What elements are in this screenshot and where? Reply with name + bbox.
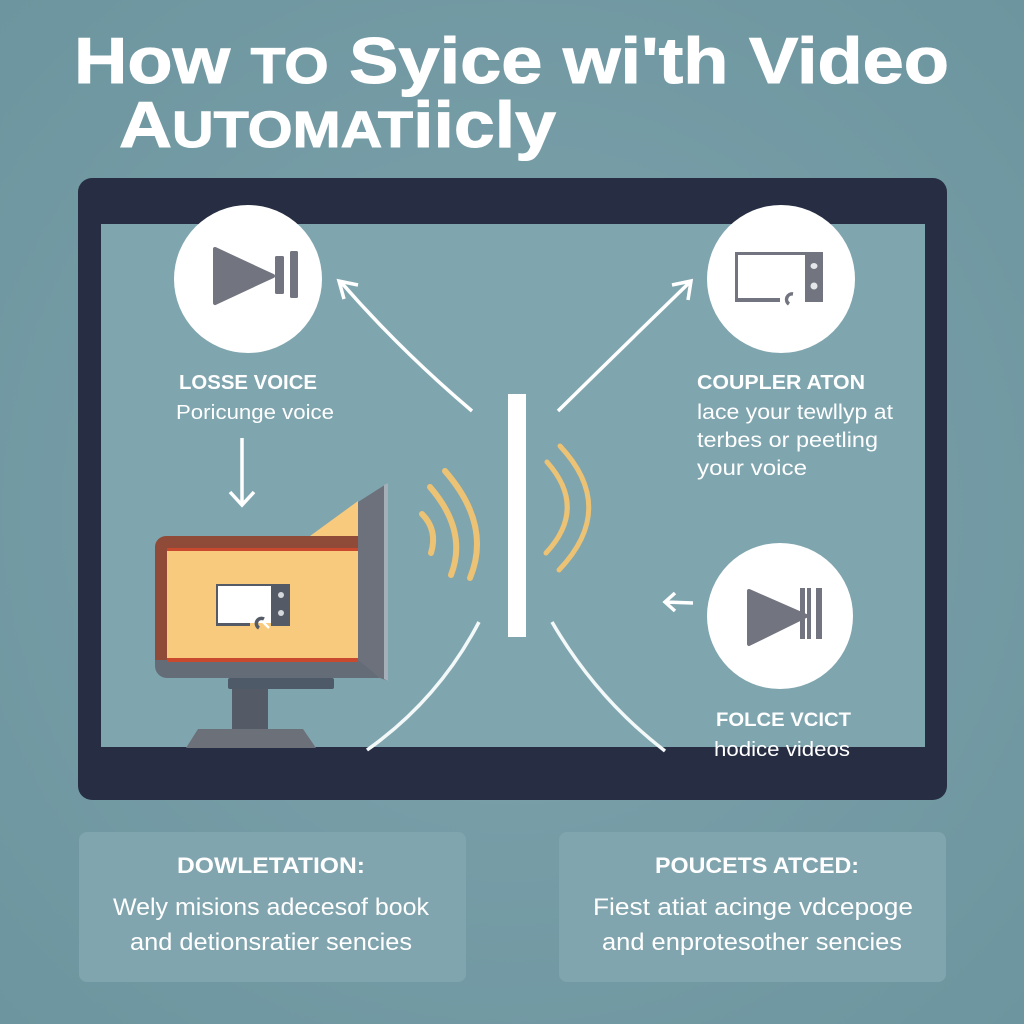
- icon: computer: [155, 483, 388, 748]
- icon: play circle lower right: [707, 543, 853, 689]
- panel: dow let ation: and detionsratier sencies: [130, 929, 412, 956]
- text: losse voice: Poricunge voice: [176, 401, 334, 424]
- arrow: up right: [558, 281, 691, 411]
- icon: screen circle top right: [707, 205, 855, 353]
- icon: sound waves left: [422, 471, 477, 578]
- text: folce vcict: hodice videos: [714, 739, 850, 761]
- text: losse voice: [176, 372, 334, 424]
- text: folce vcict: [714, 710, 851, 761]
- panel: monitor frame: [78, 178, 947, 800]
- panel: poucets atced: Fiest atiat acinge vdcepoge: [593, 894, 913, 921]
- panel: dow let ation: [79, 832, 466, 982]
- panel: dow let ation: Wely misions adecesof book: [113, 894, 430, 921]
- title: AUTOMAT iicly: [119, 88, 556, 161]
- arrow: lower left curve: [367, 622, 479, 750]
- arrow: down to computer: [230, 438, 254, 505]
- text: coupler aton: lace your tewllyp at: [697, 401, 893, 424]
- panel: dow let ation: DOWLETATION:: [177, 853, 365, 878]
- text: coupler aton: COUPLER ATON: [697, 372, 865, 394]
- panel: poucets atced: POUCETS ATCED:: [655, 853, 859, 878]
- text: coupler aton: your voice: [697, 457, 807, 480]
- panel: poucets atced: [559, 832, 946, 982]
- arrow: up left: [339, 281, 472, 411]
- text: losse voice: LOSSE VOICE: [179, 372, 317, 394]
- text: folce vcict: FOLCE VCICT: [716, 710, 851, 731]
- centre bar: [508, 394, 526, 637]
- icon: play circle top left: [174, 205, 322, 353]
- panel: poucets atced: and enprotesother sencies: [602, 929, 902, 956]
- text: coupler aton: [697, 372, 893, 480]
- icon: sound waves right: [546, 446, 589, 570]
- title: [74, 24, 949, 161]
- arrow: lower right curve: [552, 622, 665, 751]
- title: How TO Syice wi'th Video: [74, 24, 949, 97]
- text: coupler aton: terbes or peetling: [697, 429, 878, 452]
- arrow: small left: [665, 593, 693, 611]
